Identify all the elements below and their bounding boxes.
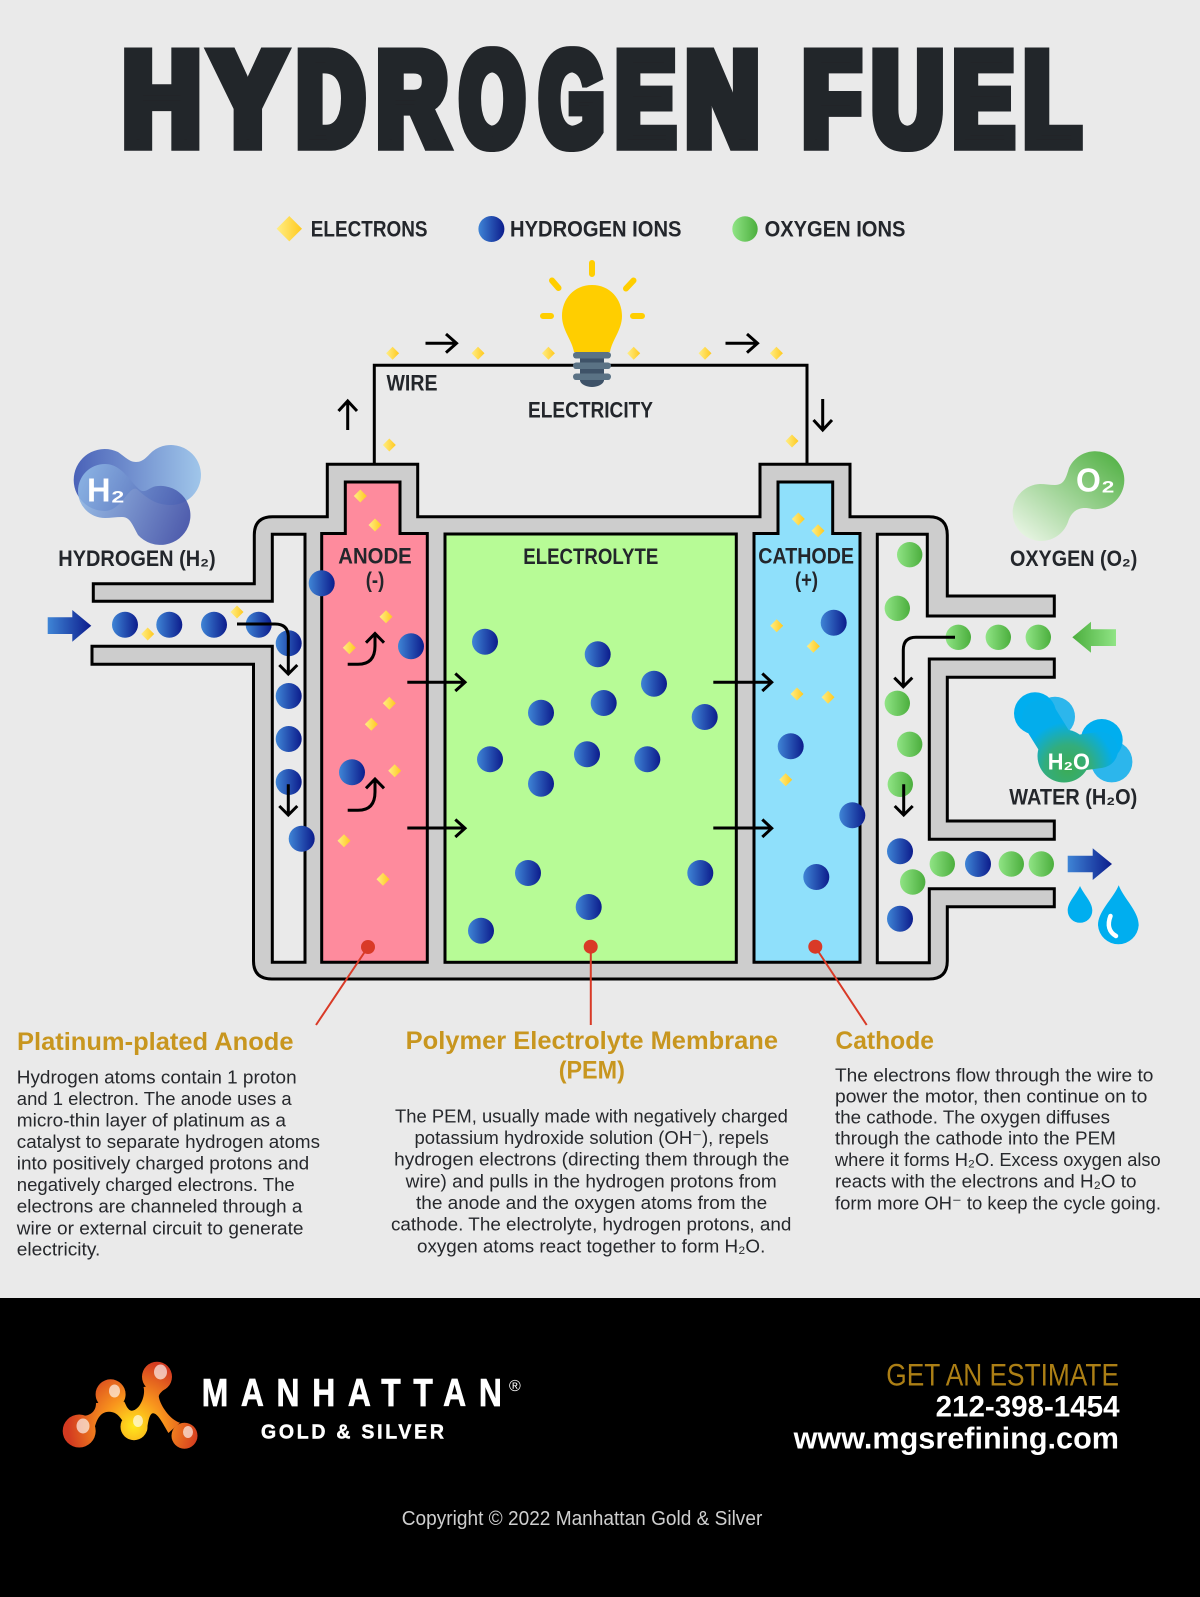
oxygen label: OXYGEN (O₂) — [1010, 546, 1137, 571]
body: cathode: where it forms H₂O. Excess oxygen also — [834, 1149, 1161, 1170]
wire label: WIRE — [386, 371, 438, 396]
copyright: Copyright © 2022 Manhattan Gold & Silver — [402, 1508, 763, 1530]
body: membrane: wire) and pulls in the hydrogen protons from — [405, 1170, 777, 1191]
arrow: hydrogen in — [48, 610, 91, 642]
contact block — [793, 1357, 1120, 1455]
heading: membrane: (PEM) — [559, 1056, 625, 1084]
text block: platinum-plated anode — [16, 1028, 320, 1260]
panel: cathode — [754, 482, 860, 962]
logo wordmark: GOLD & SILVER — [261, 1421, 445, 1443]
wire circuit — [374, 347, 807, 464]
body: cathode: reacts with the electrons and H₂O to — [835, 1171, 1136, 1192]
body: anode: and 1 electron. The anode uses a — [17, 1088, 292, 1109]
logo icon — [63, 1362, 198, 1449]
icon: water drops — [1068, 885, 1139, 944]
body: membrane — [391, 1106, 791, 1256]
hydrogen ions — [112, 570, 991, 944]
body: membrane: cathode. The electrolyte, hydrogen protons, and — [391, 1214, 791, 1235]
body: anode: wire or external circuit to generate — [16, 1217, 304, 1238]
text block: cathode — [834, 1027, 1161, 1213]
title: E — [954, 25, 1013, 174]
fuel cell housing — [92, 464, 1054, 979]
anode label: (-) — [366, 567, 384, 592]
icon: O2 molecule — [1013, 451, 1124, 541]
panel: anode — [322, 482, 427, 962]
title: O — [461, 25, 524, 174]
title: F — [803, 25, 860, 174]
body: anode: electricity. — [17, 1239, 100, 1260]
legend: electrons: ELECTRONS — [311, 217, 428, 242]
icon: O2 molecule: O₂ — [1076, 462, 1115, 499]
body: membrane: the anode and the oxygen atoms from the — [416, 1192, 767, 1213]
body: membrane: potassium hydroxide solution (OH⁻), repels — [414, 1127, 769, 1148]
icon: light bulb — [543, 263, 642, 387]
body: anode: negatively charged electrons. The — [17, 1174, 295, 1195]
title: R — [378, 25, 447, 174]
anode label: ANODE — [338, 543, 412, 568]
pointer: anode — [316, 940, 375, 1025]
legend: electrons — [277, 216, 428, 242]
anode label — [338, 543, 412, 592]
body: cathode — [834, 1065, 1161, 1213]
icon: H2O molecule: H₂O — [1048, 748, 1090, 774]
body: membrane: The PEM, usually made with negatively charged — [395, 1106, 788, 1127]
electricity label: ELECTRICITY — [528, 398, 653, 422]
arrow: oxygen in — [1072, 622, 1116, 653]
heading: cathode: Cathode — [835, 1027, 934, 1055]
body: cathode: the cathode. The oxygen diffuses — [835, 1107, 1110, 1128]
logo wordmark — [202, 1371, 521, 1443]
title: Y — [212, 25, 284, 174]
title: E — [616, 25, 675, 174]
contact block: 212-398-1454 — [936, 1391, 1120, 1424]
electrons — [141, 490, 834, 886]
body: membrane: hydrogen electrons (directing them through the — [394, 1149, 789, 1170]
pointer: membrane — [584, 940, 598, 1025]
legend: hydrogen ions: HYDROGEN IONS — [510, 217, 682, 242]
icon: H2 molecule: H₂ — [87, 472, 125, 509]
panel: electrolyte — [445, 534, 736, 962]
cathode label: (+) — [795, 567, 818, 592]
logo wordmark: ® — [509, 1378, 521, 1395]
title — [123, 25, 1080, 174]
body: cathode: The electrons flow through the wire to — [835, 1065, 1153, 1086]
body: anode: into positively charged protons and — [17, 1153, 309, 1174]
logo wordmark: MANHATTAN — [202, 1371, 502, 1415]
icon: H2O molecule — [1014, 692, 1132, 782]
title: N — [686, 25, 759, 174]
icon: H2 molecule — [74, 445, 201, 545]
body: anode: micro-thin layer of platinum as a — [17, 1110, 287, 1130]
flow arrows — [237, 624, 955, 837]
body: anode: catalyst to separate hydrogen atoms — [17, 1131, 320, 1152]
legend: oxygen ions: OXYGEN IONS — [765, 217, 905, 242]
body: anode — [16, 1066, 320, 1260]
wire flow arrows — [338, 334, 832, 430]
heading: anode: Platinum-plated Anode — [17, 1028, 294, 1056]
body: anode: electrons are channeled through a — [17, 1196, 303, 1217]
arrow: water out — [1068, 848, 1112, 880]
cathode label: CATHODE — [758, 543, 854, 568]
cathode label — [758, 543, 854, 592]
legend — [277, 216, 905, 242]
body: membrane: oxygen atoms react together to form H₂O. — [417, 1235, 765, 1256]
pointer: cathode — [808, 940, 867, 1025]
body: anode: Hydrogen atoms contain 1 proton — [17, 1066, 297, 1087]
hydrogen label: HYDROGEN (H₂) — [58, 546, 216, 571]
footer band — [0, 1298, 1200, 1597]
water label: WATER (H₂O) — [1009, 784, 1137, 809]
oxygen ions — [885, 542, 1054, 895]
title: U — [872, 25, 943, 174]
title: G — [540, 25, 603, 174]
contact block: www.mgsrefining.com — [793, 1420, 1119, 1455]
title: D — [297, 25, 364, 174]
heading: membrane: Polymer Electrolyte Membrane — [406, 1027, 778, 1055]
text block: polymer electrolyte membrane — [391, 1027, 791, 1256]
title: H — [123, 25, 200, 174]
contact block: GET AN ESTIMATE — [886, 1357, 1119, 1393]
electrolyte label: ELECTROLYTE — [523, 544, 658, 569]
title: L — [1024, 25, 1080, 174]
body: cathode: power the motor, then continue on to — [835, 1086, 1147, 1107]
heading: membrane — [406, 1027, 778, 1084]
body: cathode: form more OH⁻ to keep the cycle going. — [835, 1192, 1161, 1213]
body: cathode: through the cathode into the PEM — [835, 1128, 1116, 1149]
